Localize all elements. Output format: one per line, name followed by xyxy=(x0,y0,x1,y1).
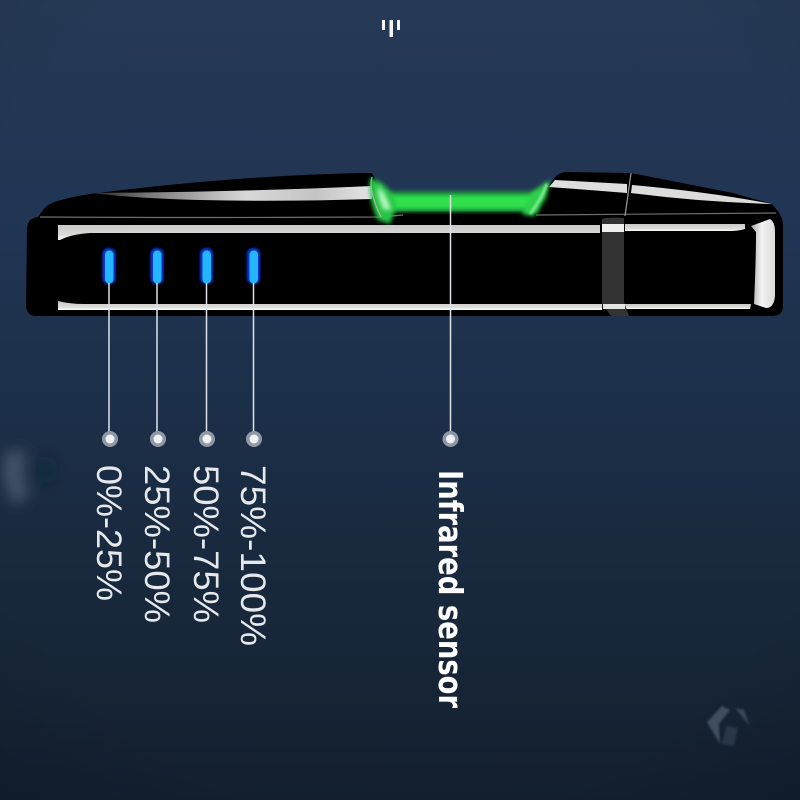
leader and dot: 0%-25% xyxy=(102,283,118,447)
leader and dot: 25%-50% xyxy=(150,283,166,447)
decorative blurred shape left xyxy=(3,450,58,504)
battery LED 2 xyxy=(150,248,164,284)
leader and dot: infrared sensor xyxy=(442,195,458,447)
battery LED 4 xyxy=(247,248,260,284)
green left glow xyxy=(370,177,396,224)
icon: top logo bars xyxy=(382,20,400,37)
decorative faint icon bottom right xyxy=(707,706,750,746)
right cap highlight xyxy=(549,180,627,193)
green right glow xyxy=(522,180,550,216)
label: 0%-25%: 0%-25% xyxy=(89,465,128,601)
green sensor band xyxy=(378,192,543,218)
label: Infrared sensor: Infrared sensor xyxy=(431,470,470,709)
label: 50%-75%: 50%-75% xyxy=(186,465,225,623)
label: 75%-100%: 75%-100% xyxy=(233,465,272,646)
sliding band xyxy=(602,218,629,316)
leader and dot: 50%-75% xyxy=(199,283,215,447)
device: lighter body xyxy=(26,172,783,316)
battery LED 3 xyxy=(200,248,213,284)
left cap highlight xyxy=(92,186,372,201)
cap seam lines xyxy=(40,173,776,218)
bottom chrome strip xyxy=(58,301,602,310)
leader and dot: 75%-100% xyxy=(246,283,262,447)
top chrome strip xyxy=(58,225,600,240)
battery LED 1 xyxy=(102,248,116,284)
body silhouette xyxy=(26,172,783,316)
chrome end cap xyxy=(751,219,775,308)
label: 25%-50%: 25%-50% xyxy=(137,465,176,623)
